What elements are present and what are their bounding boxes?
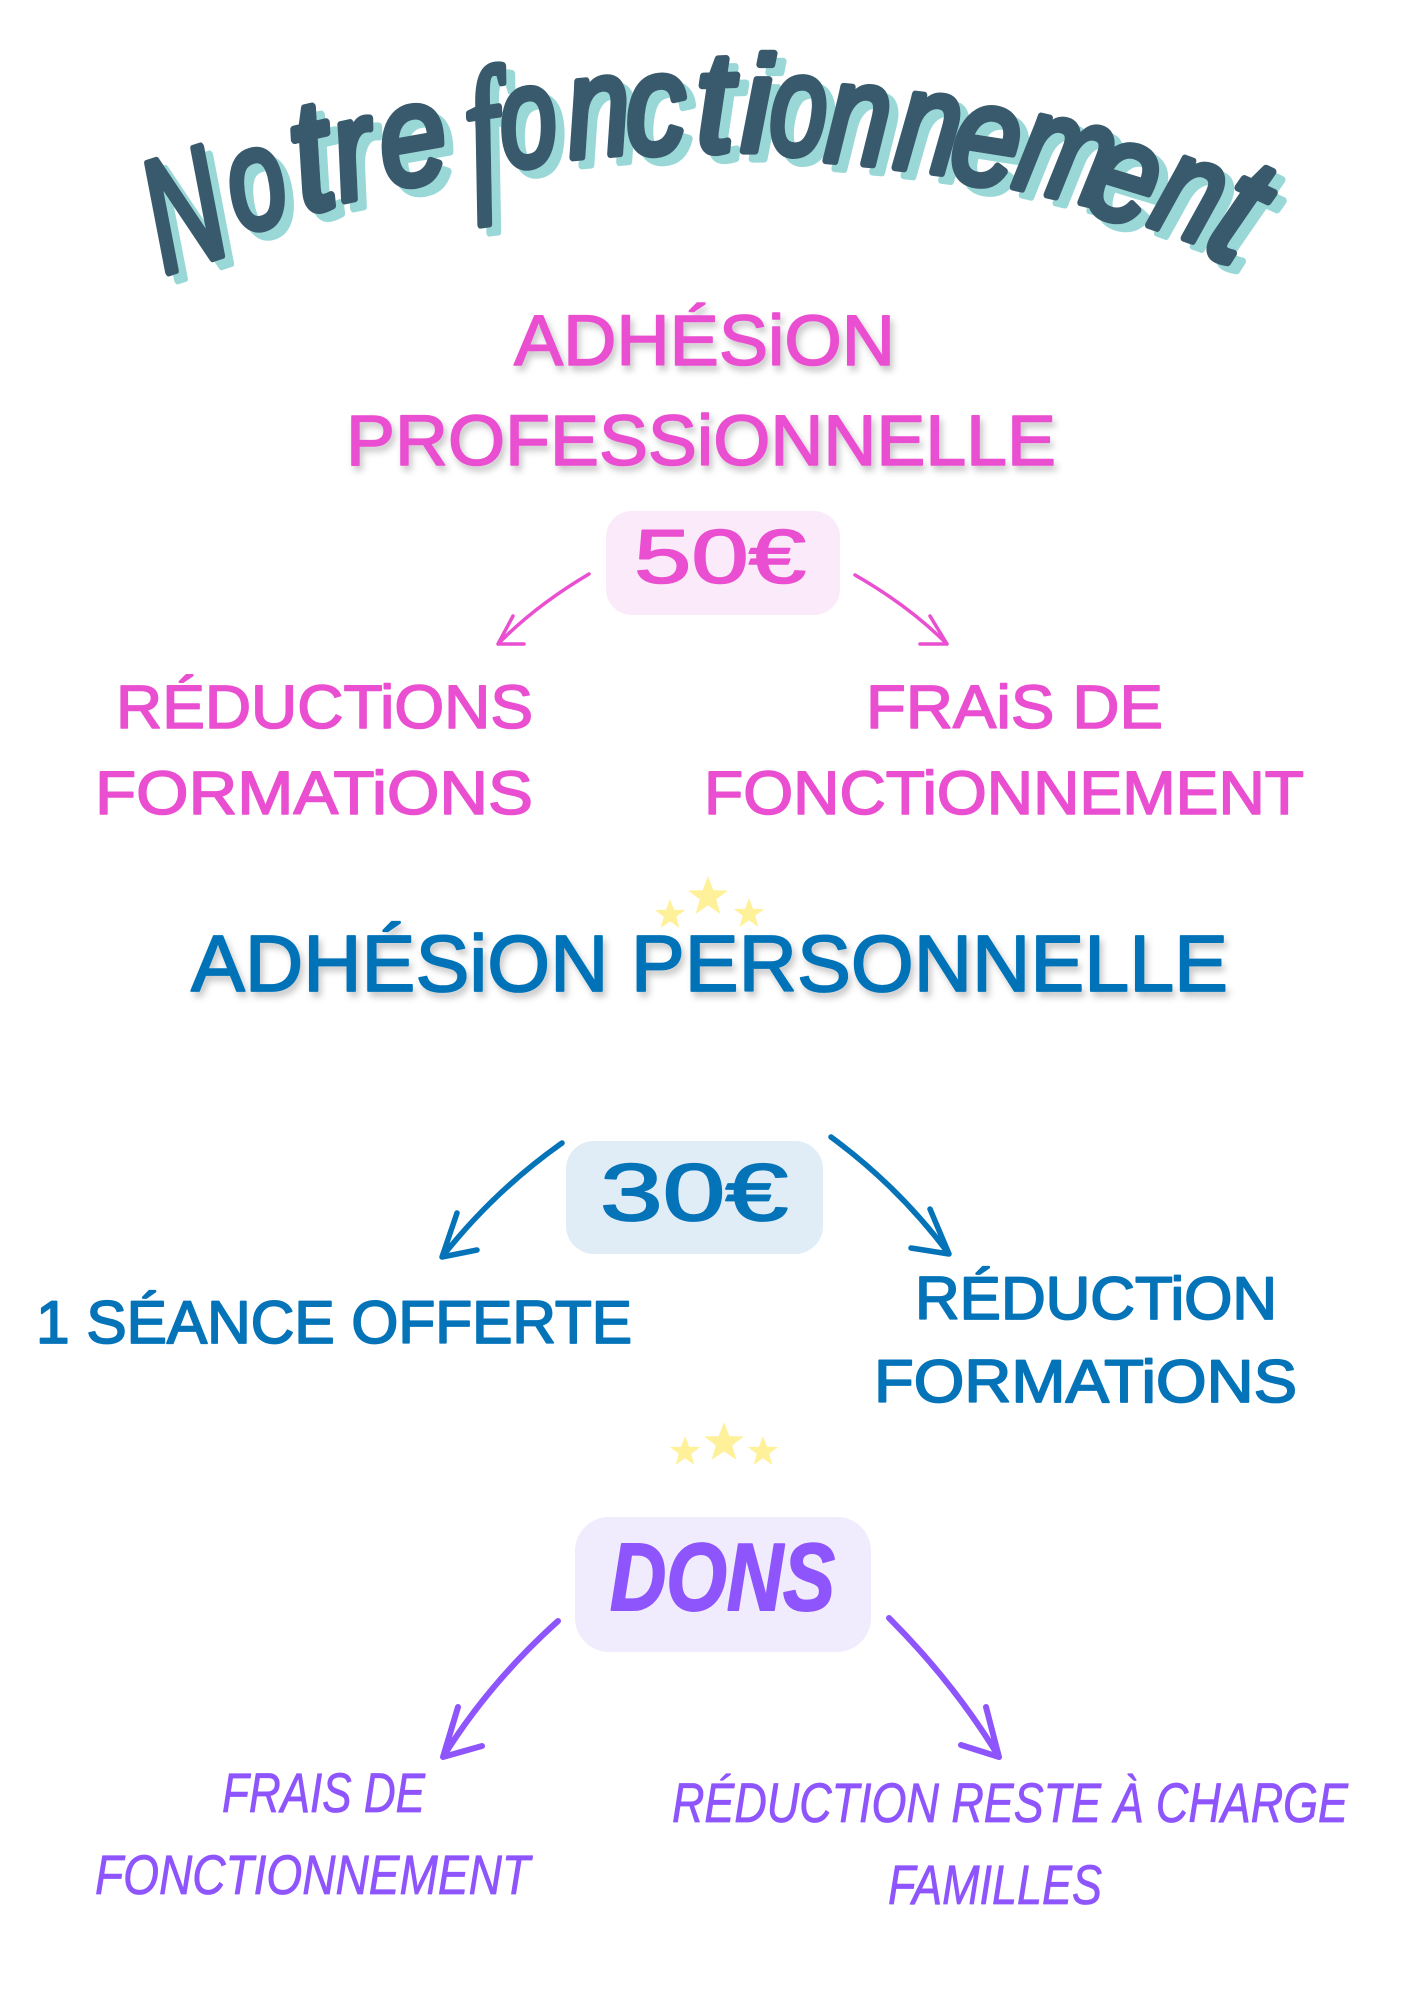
- title: e: [942, 52, 1033, 219]
- arrow: right: [855, 575, 947, 644]
- text: réductions formations: [95, 673, 533, 827]
- title: o: [768, 26, 830, 186]
- badge: dons: [575, 1517, 871, 1652]
- text: frais de fonctionnement: FONCTIONNEMENT: [95, 1843, 533, 1906]
- text: frais de fonctionnement: FRAIS DE: [222, 1761, 426, 1824]
- title: o: [489, 35, 565, 199]
- price badge: 50€: [606, 511, 840, 615]
- arrow: right: [889, 1618, 999, 1757]
- price badge: 30€: [566, 1141, 823, 1254]
- title: m: [1004, 63, 1132, 238]
- heading: adhésion personnelle: ADHÉSiON PERSONNELLE: [191, 919, 1228, 1008]
- title: [121, 23, 1299, 306]
- text: réductions formations: RÉDUCTiONS: [116, 673, 533, 741]
- title: t: [272, 65, 353, 245]
- title: n: [1136, 105, 1249, 275]
- price badge: 30€: 30€: [600, 1148, 788, 1238]
- text: réduction formations: RÉDUCTiON: [915, 1265, 1277, 1332]
- title: n: [821, 34, 898, 197]
- title: f: [453, 32, 525, 226]
- arrow: left: [442, 1143, 562, 1257]
- arrow: left: [498, 574, 589, 644]
- price badge: 50€: 50€: [634, 515, 806, 600]
- title: r: [316, 66, 393, 231]
- text: réduction reste à charge familles: FAMILLES: [888, 1853, 1102, 1916]
- badge: dons: DONS: [610, 1524, 835, 1631]
- title: n: [889, 41, 971, 206]
- arrow: left: [443, 1621, 558, 1757]
- panel: adhésion personnelle: [36, 919, 1297, 1415]
- title: i: [741, 29, 774, 180]
- text: frais de fonctionnement: [95, 1761, 533, 1906]
- heading: adhésion professionnelle: [346, 302, 1056, 481]
- title: e: [1071, 87, 1182, 258]
- text: réduction formations: FORMATiONS: [874, 1348, 1297, 1415]
- arrow: right: [831, 1137, 949, 1254]
- title: o: [207, 96, 302, 263]
- title: n: [559, 26, 636, 189]
- icon: stars: [655, 876, 764, 928]
- text: frais de fonctionnement: FONCTiONNEMENT: [704, 759, 1304, 827]
- heading: adhésion professionnelle: ADHÉSiON: [514, 302, 895, 381]
- heading: adhésion professionnelle: PROFESSiONNELLE: [346, 402, 1056, 481]
- icon: stars: [670, 1422, 778, 1465]
- text: 1 séance offerte: 1 SÉANCE OFFERTE: [36, 1289, 632, 1356]
- title: t: [1187, 122, 1299, 298]
- title: c: [621, 23, 690, 185]
- text: réductions formations: FORMATiONS: [95, 759, 533, 827]
- panel: dons: [95, 1517, 1349, 1916]
- text: réduction reste à charge familles: [672, 1771, 1349, 1916]
- text: frais de fonctionnement: [704, 673, 1304, 827]
- panel: adhésion professionnelle: [95, 302, 1304, 827]
- title: N: [121, 115, 246, 306]
- text: frais de fonctionnement: FRAiS DE: [866, 673, 1163, 741]
- title: t: [693, 23, 741, 182]
- text: réduction formations: [874, 1265, 1297, 1415]
- title: e: [365, 51, 458, 219]
